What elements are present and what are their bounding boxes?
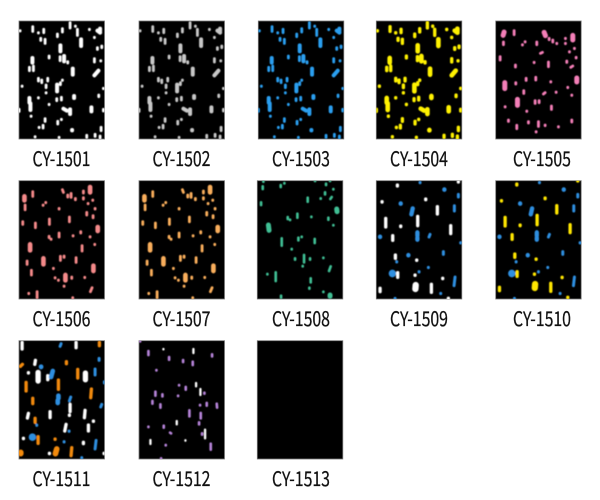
- panel: CY-1502: [139, 21, 224, 172]
- panel: CY-1513: CY-1513: [272, 463, 330, 492]
- panel: CY-1503: [258, 21, 344, 172]
- panel: CY-1513: [257, 341, 343, 492]
- panel: CY-1510: [496, 181, 581, 332]
- panel: CY-1507: [139, 181, 224, 332]
- panel: CY-1504: CY-1504: [390, 143, 448, 172]
- panel: CY-1502: CY-1502: [152, 143, 210, 172]
- panel: CY-1512: CY-1512: [152, 463, 210, 492]
- panel: CY-1508: CY-1508: [272, 303, 330, 332]
- panel: CY-1512: [139, 341, 224, 492]
- panel: CY-1510: CY-1510: [513, 303, 571, 332]
- panel: CY-1511: CY-1511: [32, 463, 90, 492]
- panel: CY-1506: [19, 181, 104, 332]
- panel: CY-1505: CY-1505: [513, 143, 571, 172]
- panel: CY-1504: [376, 21, 462, 172]
- panel: CY-1509: [376, 181, 462, 332]
- panel: CY-1509: CY-1509: [390, 303, 448, 332]
- panel: CY-1505: [496, 21, 581, 172]
- panel: CY-1501: [19, 21, 104, 172]
- panel: CY-1501: CY-1501: [32, 143, 90, 172]
- panel: CY-1511: [19, 341, 104, 492]
- panel: CY-1503: CY-1503: [272, 143, 330, 172]
- panel: CY-1507: CY-1507: [152, 303, 210, 332]
- panel: CY-1508: [257, 181, 343, 332]
- panel: CY-1506: CY-1506: [32, 303, 90, 332]
